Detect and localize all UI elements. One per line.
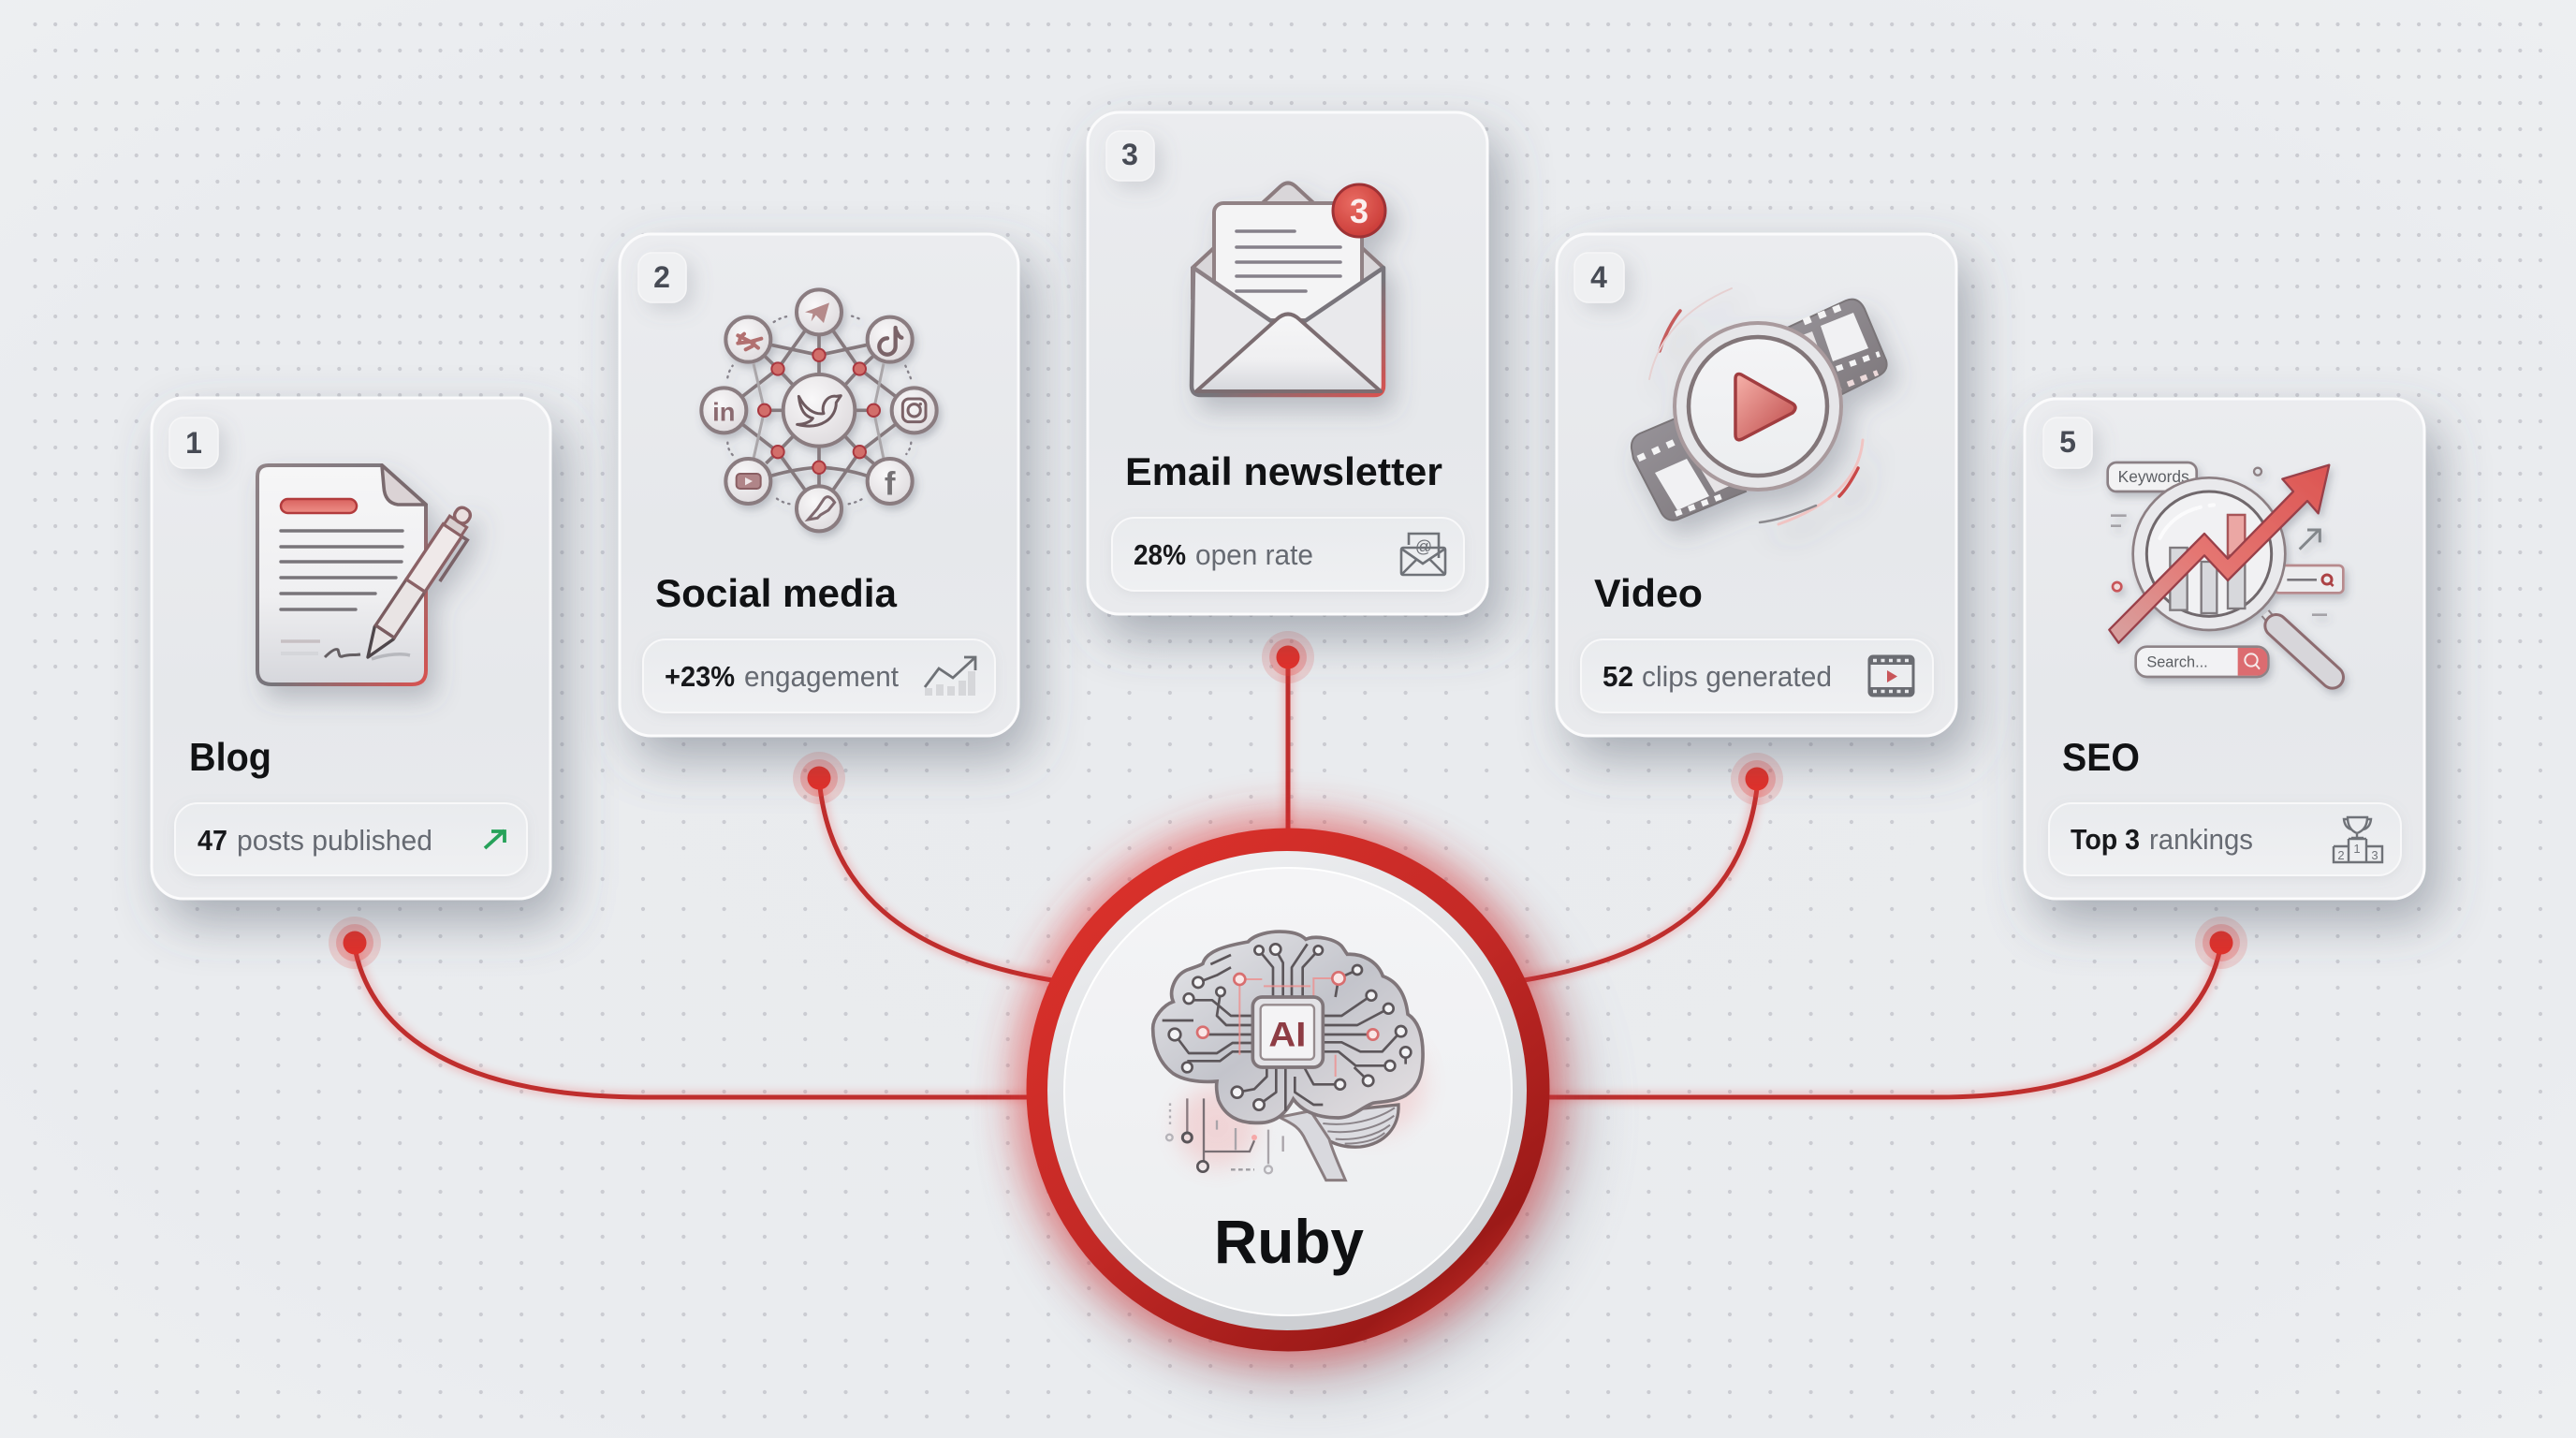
film strip upper — [1783, 300, 1887, 398]
stat pill — [175, 803, 527, 875]
AI chip — [1252, 997, 1323, 1067]
card surface — [152, 398, 550, 899]
stat pill: clips generated — [1642, 660, 1832, 693]
icon: trophy podium: 1 — [2353, 842, 2361, 856]
icon: mail at-sign: @ — [1415, 537, 1432, 556]
icon: trophy podium: 3 — [2371, 848, 2378, 862]
motion arcs — [1649, 288, 1863, 524]
icon: trophy podium — [2334, 817, 2382, 862]
step badge 1 — [169, 418, 218, 468]
stat pill — [1581, 639, 1933, 712]
icon: magnifier with growth arrow: Keywords — [2118, 467, 2189, 486]
cerebellum — [1310, 1105, 1398, 1147]
icon: social network: in — [712, 397, 735, 426]
step badge 2: 2 — [653, 260, 670, 294]
circuit nodes — [1169, 944, 1411, 1110]
card surface — [1088, 112, 1487, 614]
icon: social network: f — [885, 466, 896, 503]
card surface — [620, 234, 1018, 736]
icon: film frame — [1869, 656, 1913, 696]
circuit traces — [1163, 944, 1406, 1111]
icon: social network — [701, 289, 937, 531]
stat pill: +23% — [665, 660, 735, 693]
red outer ring — [1026, 828, 1550, 1352]
stat pill: engagement — [744, 660, 899, 693]
icon: open envelope with notification — [1192, 183, 1385, 395]
stat pill: posts published — [237, 824, 432, 857]
stat pill: Top 3 — [2071, 823, 2140, 856]
icon: magnifier with growth arrow — [2108, 462, 2343, 677]
panel: Email newsletter card — [1088, 112, 1487, 614]
heading: Blog — [189, 735, 271, 779]
connector lines from cards to hub — [354, 657, 2221, 1097]
central hub: Ruby — [1015, 816, 1573, 1381]
icon: play button with film strip — [1632, 288, 1887, 524]
stat pill: rankings — [2149, 823, 2253, 856]
stat pill: open rate — [1195, 538, 1313, 571]
stat pill — [1112, 518, 1464, 591]
heading: SEO — [2062, 735, 2140, 779]
grey plate — [1047, 851, 1527, 1330]
step badge 3: 3 — [1121, 138, 1138, 171]
panel: Social media card — [620, 234, 1018, 736]
brain stem — [1280, 1111, 1345, 1181]
step badge 5 — [2043, 418, 2092, 468]
step badge 1: 1 — [185, 426, 202, 460]
step badge 2 — [638, 253, 686, 302]
mini search bar — [2136, 647, 2268, 677]
icon: green up arrow — [485, 830, 505, 848]
panel: SEO card — [2025, 399, 2424, 899]
panel: Video card — [1557, 234, 1956, 736]
icon: AI brain — [1153, 932, 1426, 1181]
stat pill: 52 — [1603, 660, 1633, 693]
connector pins — [329, 631, 2247, 969]
stat pill: 47 — [198, 824, 227, 857]
card surface — [2025, 399, 2424, 899]
panel: Blog card — [152, 398, 550, 899]
inner white face — [1064, 868, 1512, 1315]
heading: Email newsletter — [1125, 449, 1442, 493]
heading: Video — [1594, 571, 1703, 615]
hub title: Ruby — [1214, 1207, 1364, 1276]
circuit tails — [1166, 1098, 1283, 1173]
icon: growth chart — [925, 657, 975, 696]
icon: document with pen — [257, 465, 481, 684]
stat pill — [643, 639, 995, 712]
stat pill: 28% — [1134, 538, 1186, 571]
step badge 5: 5 — [2059, 425, 2076, 459]
heading: Social media — [655, 571, 898, 615]
cortex — [1153, 932, 1423, 1123]
mini search bar: Search... — [2146, 653, 2208, 670]
icon: mail at-sign — [1401, 534, 1445, 575]
disc — [1675, 323, 1841, 490]
icon: open envelope with notification: 3 — [1350, 192, 1368, 230]
icon: trophy podium: 2 — [2337, 848, 2345, 862]
step badge 4: 4 — [1590, 260, 1607, 294]
AI chip: AI — [1268, 1014, 1306, 1053]
step badge 3 — [1106, 131, 1154, 181]
stat pill — [2049, 803, 2401, 875]
film strip lower — [1632, 418, 1746, 521]
card surface — [1557, 234, 1956, 736]
step badge 4 — [1574, 253, 1624, 302]
